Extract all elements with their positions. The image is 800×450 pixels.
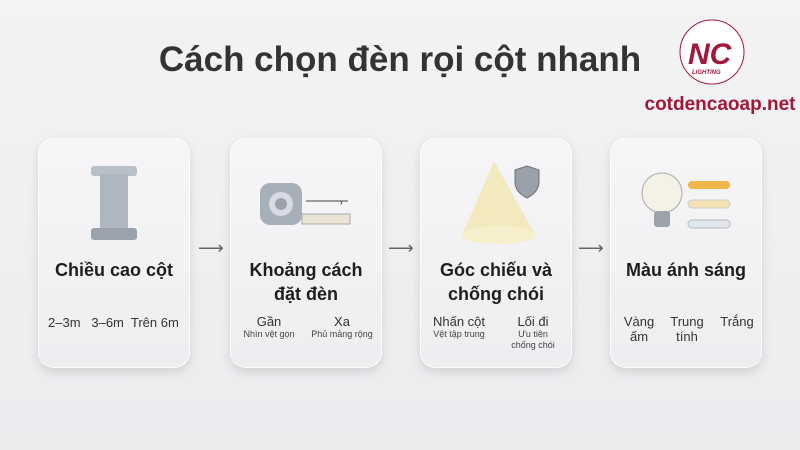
panel: beam angle: chống chói (511, 340, 555, 350)
icon: tape measure: › (340, 198, 343, 207)
options: Nhấn cột (433, 314, 485, 329)
panel: distance: Xa (334, 314, 350, 329)
panel: light color: Trắng (720, 314, 754, 329)
options (433, 314, 485, 339)
panel: beam angle (420, 138, 572, 368)
panel: column height (38, 138, 190, 368)
logo (644, 20, 796, 115)
heading: Chiều cao cột (55, 260, 173, 280)
heading (440, 260, 552, 304)
heading: Góc chiếu và (440, 260, 552, 280)
options (624, 314, 654, 344)
panel: beam angle: Lối đi (517, 314, 549, 329)
options: ấm (630, 329, 648, 344)
options: Vàng (624, 314, 654, 329)
heading: chống chói (448, 284, 544, 304)
heading: Màu ánh sáng (626, 260, 746, 280)
heading: Khoảng cách (249, 260, 363, 280)
heading (249, 260, 363, 304)
heading: đặt đèn (274, 284, 338, 304)
icon: column (91, 166, 137, 240)
panel: distance (230, 138, 382, 368)
panel: light color (610, 138, 762, 368)
arrow: ⟶ (578, 238, 604, 258)
options: Vệt tập trung (433, 329, 485, 339)
panel: light color: Trung (670, 314, 704, 329)
logo: cotdencaoap.net (644, 94, 795, 115)
options: Gần (257, 314, 281, 329)
options: Nhìn vệt gọn (243, 329, 295, 339)
icon: tape measure (260, 183, 350, 225)
panel: beam angle: Ưu tiên (518, 329, 548, 339)
icon: bulb with color bars (642, 172, 730, 228)
arrow: ⟶ (198, 238, 224, 258)
panel: light color: tính (676, 329, 698, 344)
options: 2–3m 3–6m Trên 6m (48, 315, 179, 330)
logo: LIGHTING (692, 70, 721, 76)
options (243, 314, 295, 339)
title: Cách chọn đèn rọi cột nhanh (159, 40, 641, 79)
arrow: ⟶ (388, 238, 414, 258)
logo: NC (688, 38, 733, 71)
panel: distance: Phủ mảng rộng (311, 329, 373, 339)
icon: light cone and shield (462, 161, 540, 244)
